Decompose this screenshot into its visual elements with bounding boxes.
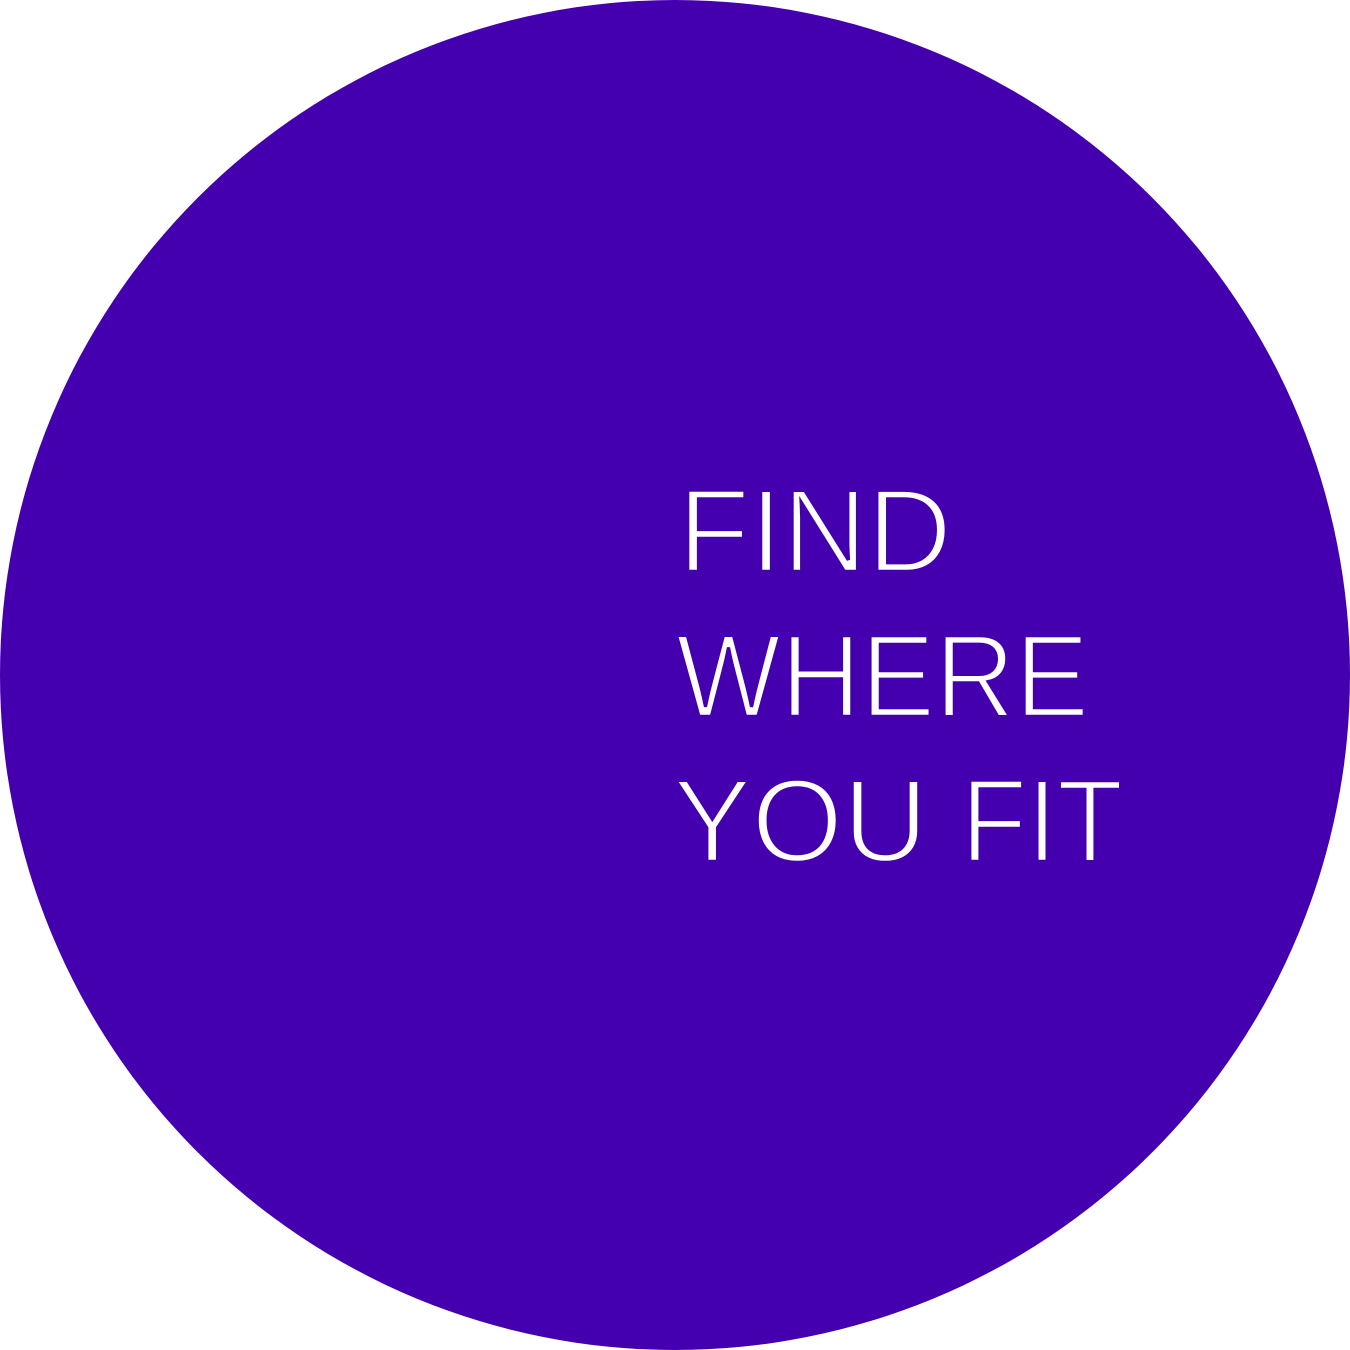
title: find where you fit: FIT xyxy=(961,756,1123,888)
title: find where you fit xyxy=(673,466,1123,888)
title: find where you fit: FIND xyxy=(678,466,952,598)
title: find where you fit: YOU xyxy=(673,756,928,888)
title: find where you fit: WHERE xyxy=(676,610,1089,742)
